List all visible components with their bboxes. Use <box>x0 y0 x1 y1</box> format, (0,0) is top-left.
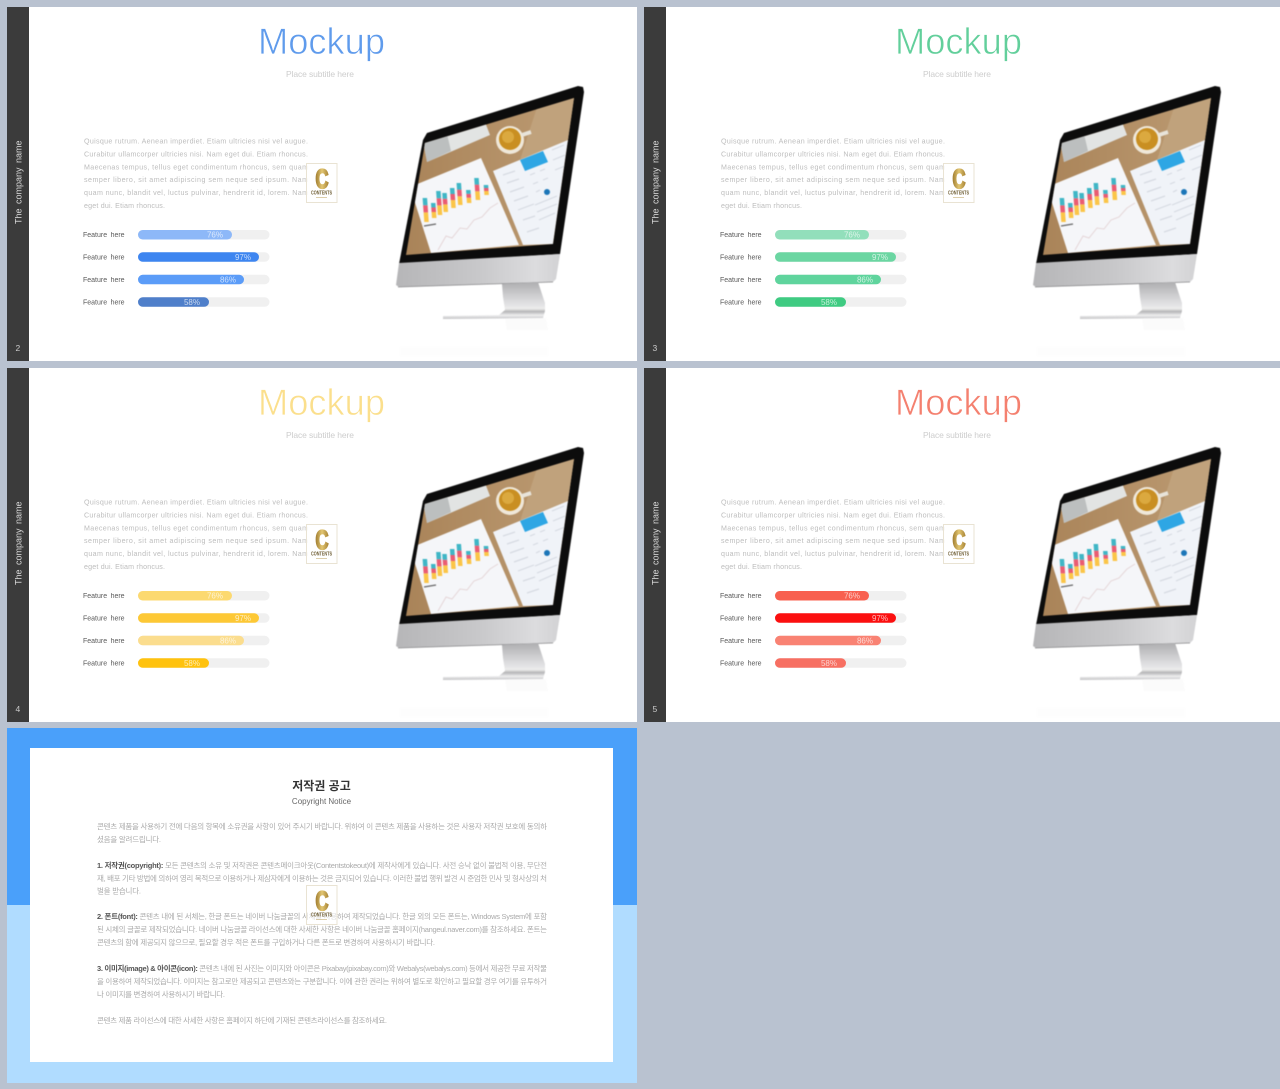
feature bars: 76% <box>844 592 860 600</box>
body text <box>84 138 308 210</box>
section 2 font <box>97 911 547 947</box>
section 1 copyright <box>97 860 547 896</box>
title: Mockup <box>895 382 1022 423</box>
feature bars: 58% <box>184 659 200 668</box>
sidebar with company name <box>644 7 666 361</box>
body text: Maecenas tempus, tellus eget condimentum rhoncus, sem quam <box>721 163 945 171</box>
section 2 font: 콘텐츠의 함에 제공되지 않으므로, 필요할 경우 적은 폰트를 구입하거나 다른 폰트로 변경하여 사용하시기 바랍니다. <box>97 937 435 947</box>
sidebar with company name: 3 <box>652 343 658 353</box>
sidebar with company name <box>7 7 29 361</box>
section 3 image and icon: 을 이용하여 제작되었습니다. 이미지는 참고로만 제공되고 콘텐츠와는 구분합니다. 이에 관한 권리는 위하여 별도로 확인하고 필요할 경우 여기를 유투하거 <box>97 976 547 986</box>
body text: Curabitur ullamcorper ultricies nisi. Nam eget dui. Etiam rhoncus. <box>721 511 945 519</box>
feature bars <box>83 591 270 668</box>
sidebar with company name: The company name <box>14 501 24 585</box>
body text: eget dui. Etiam rhoncus. <box>84 563 165 571</box>
sidebar with company name: 5 <box>652 704 658 714</box>
title: Mockup <box>258 382 385 423</box>
feature bars: 86% <box>857 275 873 284</box>
body text: Quisque rutrum. Aenean imperdiet. Etiam ultricies nisi vel augue. <box>721 498 945 506</box>
feature bars: 97% <box>872 614 888 623</box>
closing note: 콘텐츠 제품 라이선스에 대한 사세한 사항은 홈페이지 하단에 기재된 콘텐츠라이선스를 참조하세요. <box>97 1015 387 1025</box>
feature bars: 76% <box>844 230 860 240</box>
title: Mockup <box>258 21 385 62</box>
slide 4 panel: red <box>644 368 1280 722</box>
body text: Maecenas tempus, tellus eget condimentum rhoncus, sem quam <box>721 524 945 532</box>
feature bars: 86% <box>857 636 873 645</box>
body text: eget dui. Etiam rhoncus. <box>721 563 802 571</box>
title: Mockup <box>895 21 1022 62</box>
copyright intro text: 셨음을 알려드립니다. <box>97 834 161 844</box>
section 3 image and icon: 3. 이미지(image) & 아이콘(icon): 콘텐츠 내에 된 사진는 이미지와 아이콘은 Pixabay(pixabay.com)와 Webalys(webalys.com) 등에서 제공한 무료 저작물 <box>97 963 547 973</box>
sidebar with company name: 2 <box>16 343 20 353</box>
feature bars: Feature here <box>83 277 125 284</box>
body text: semper libero, sit amet adipiscing sem neque sed ipsum. Nam <box>84 537 308 545</box>
feature bars: Feature here <box>83 254 125 262</box>
sidebar with company name: The company name <box>650 501 660 585</box>
feature bars: Feature here <box>83 300 125 306</box>
body text: Maecenas tempus, tellus eget condimentum rhoncus, sem quam <box>84 524 308 532</box>
subtitle: Place subtitle here <box>286 69 354 79</box>
feature bars: Feature here <box>720 300 762 306</box>
body text <box>721 138 945 210</box>
feature bars: Feature here <box>720 593 762 600</box>
feature bars: 58% <box>184 298 200 307</box>
feature bars: 97% <box>872 253 888 262</box>
monitor mockup <box>1033 86 1221 356</box>
feature bars <box>720 591 906 668</box>
feature bars: Feature here <box>720 232 762 239</box>
feature bars: Feature here <box>83 638 125 645</box>
body text: semper libero, sit amet adipiscing sem neque sed ipsum. Nam <box>721 176 945 184</box>
slide 2 panel: green <box>644 7 1280 361</box>
watermark logo: CONTENTS <box>311 912 333 918</box>
feature bars: 76% <box>207 230 223 240</box>
copyright intro text <box>97 821 547 844</box>
body text: Curabitur ullamcorper ultricies nisi. Nam eget dui. Etiam rhoncus. <box>721 150 945 158</box>
feature bars: 86% <box>220 636 236 645</box>
watermark logo: C <box>952 525 966 555</box>
watermark logo: C <box>316 886 328 916</box>
watermark logo: CONTENTS <box>948 552 970 558</box>
body text: eget dui. Etiam rhoncus. <box>84 202 165 210</box>
feature bars: Feature here <box>720 277 762 284</box>
body text: semper libero, sit amet adipiscing sem neque sed ipsum. Nam <box>721 537 945 545</box>
feature bars <box>720 230 906 307</box>
sidebar with company name: The company name <box>14 140 24 224</box>
section 2 font: 된 시체의 글꼴로 제작되었습니다. 네이버 나눔글꼴 라이선스에 대한 사세한 사항은 네이버 나눔글꼴 홈페이지(hangeul.naver.com)를 참조하세요. 폰트는 <box>97 924 547 934</box>
body text: Maecenas tempus, tellus eget condimentum rhoncus, sem quam <box>84 163 308 171</box>
watermark logo: CONTENTS <box>311 552 333 558</box>
subtitle: Place subtitle here <box>286 430 354 440</box>
section 1 copyright: 벌을 받습니다. <box>97 886 141 896</box>
body text: Curabitur ullamcorper ultricies nisi. Nam eget dui. Etiam rhoncus. <box>84 511 308 519</box>
body text: Quisque rutrum. Aenean imperdiet. Etiam ultricies nisi vel augue. <box>721 138 945 146</box>
monitor mockup <box>396 86 584 356</box>
feature bars: Feature here <box>83 616 125 622</box>
feature bars: Feature here <box>83 660 125 668</box>
section 2 font: 2. 폰트(font): 콘텐츠 내에 된 서체는, 한글 폰트는 네이버 나눔글꼴의 서체를 사용하여 제작되었습니다. 한글 외의 모든 폰트는, Windows System에 포함 <box>97 911 547 921</box>
section 1 copyright: 재, 배포 기타 방법에 의하여 영리 목적으로 이용하거나 제삼자에게 이용하는 것은 금지되어 있습니다. 이러한 불법 행위 발견 시 준엄한 민사 및 형사상의 처 <box>97 873 547 883</box>
copyright notice panel <box>7 728 637 1083</box>
feature bars: Feature here <box>720 660 762 668</box>
slide 1 panel: blue <box>7 7 637 361</box>
feature bars: Feature here <box>720 254 762 262</box>
feature bars: 76% <box>207 592 223 600</box>
watermark logo: CONTENTS <box>311 190 333 196</box>
feature bars: 58% <box>821 298 837 307</box>
sidebar with company name <box>644 368 666 722</box>
watermark logo <box>306 164 337 202</box>
monitor mockup <box>396 447 584 717</box>
body text: quam nunc, blandit vel, luctus pulvinar, hendrerit id, lorem. Nam <box>84 550 308 558</box>
slide 3 panel: yellow <box>7 368 637 722</box>
sidebar with company name: 4 <box>16 704 20 714</box>
feature bars: Feature here <box>83 232 125 239</box>
feature bars: Feature here <box>720 638 762 645</box>
watermark logo <box>944 164 974 202</box>
body text: quam nunc, blandit vel, luctus pulvinar, hendrerit id, lorem. Nam <box>84 189 308 197</box>
body text <box>84 498 308 571</box>
body text: semper libero, sit amet adipiscing sem neque sed ipsum. Nam <box>84 176 308 184</box>
subtitle: Place subtitle here <box>923 430 991 440</box>
watermark logo: C <box>952 164 966 194</box>
watermark logo <box>306 524 337 564</box>
body text: eget dui. Etiam rhoncus. <box>721 202 802 210</box>
body text: quam nunc, blandit vel, luctus pulvinar, hendrerit id, lorem. Nam <box>721 550 945 558</box>
feature bars: Feature here <box>720 616 762 622</box>
sidebar with company name <box>7 368 29 722</box>
body text <box>721 498 945 571</box>
feature bars: Feature here <box>83 593 125 600</box>
copyright heading: 저작권 공고 <box>292 778 351 793</box>
feature bars: 86% <box>220 275 236 284</box>
section 3 image and icon <box>97 963 547 999</box>
copyright subheading: Copyright Notice <box>292 797 352 806</box>
sidebar with company name: The company name <box>650 140 660 224</box>
feature bars: 97% <box>235 614 251 623</box>
body text: quam nunc, blandit vel, luctus pulvinar, hendrerit id, lorem. Nam <box>721 189 945 197</box>
feature bars: 58% <box>821 659 837 668</box>
section 1 copyright: 1. 저작권(copyright): 모든 콘텐츠의 소유 및 저작권은 콘텐츠메이크아웃(Contentstokeout)에 제작사에게 있습니다. 사전 승낙 없이 불법적 이용, 무단전 <box>97 860 547 870</box>
feature bars <box>83 230 270 307</box>
monitor mockup <box>1033 447 1221 717</box>
body text: Quisque rutrum. Aenean imperdiet. Etiam ultricies nisi vel augue. <box>84 498 308 506</box>
section 3 image and icon: 나 이미지를 변경하여 사용하시기 바랍니다. <box>97 989 225 999</box>
watermark logo: C <box>316 525 328 555</box>
watermark logo <box>944 524 974 564</box>
body text: Curabitur ullamcorper ultricies nisi. Nam eget dui. Etiam rhoncus. <box>84 150 308 158</box>
watermark logo: CONTENTS <box>948 190 970 196</box>
subtitle: Place subtitle here <box>923 69 991 79</box>
watermark logo: C <box>316 164 328 194</box>
body text: Quisque rutrum. Aenean imperdiet. Etiam ultricies nisi vel augue. <box>84 138 308 146</box>
feature bars: 97% <box>235 253 251 262</box>
watermark logo <box>306 886 337 924</box>
copyright intro text: 콘텐츠 제품을 사용하기 전에 다음의 항목에 소유권을 사항이 있어 주시기 바랍니다. 위하여 이 콘텐츠 제품을 사용하는 것은 사용자 저작권 보호에 동의하 <box>97 821 547 831</box>
